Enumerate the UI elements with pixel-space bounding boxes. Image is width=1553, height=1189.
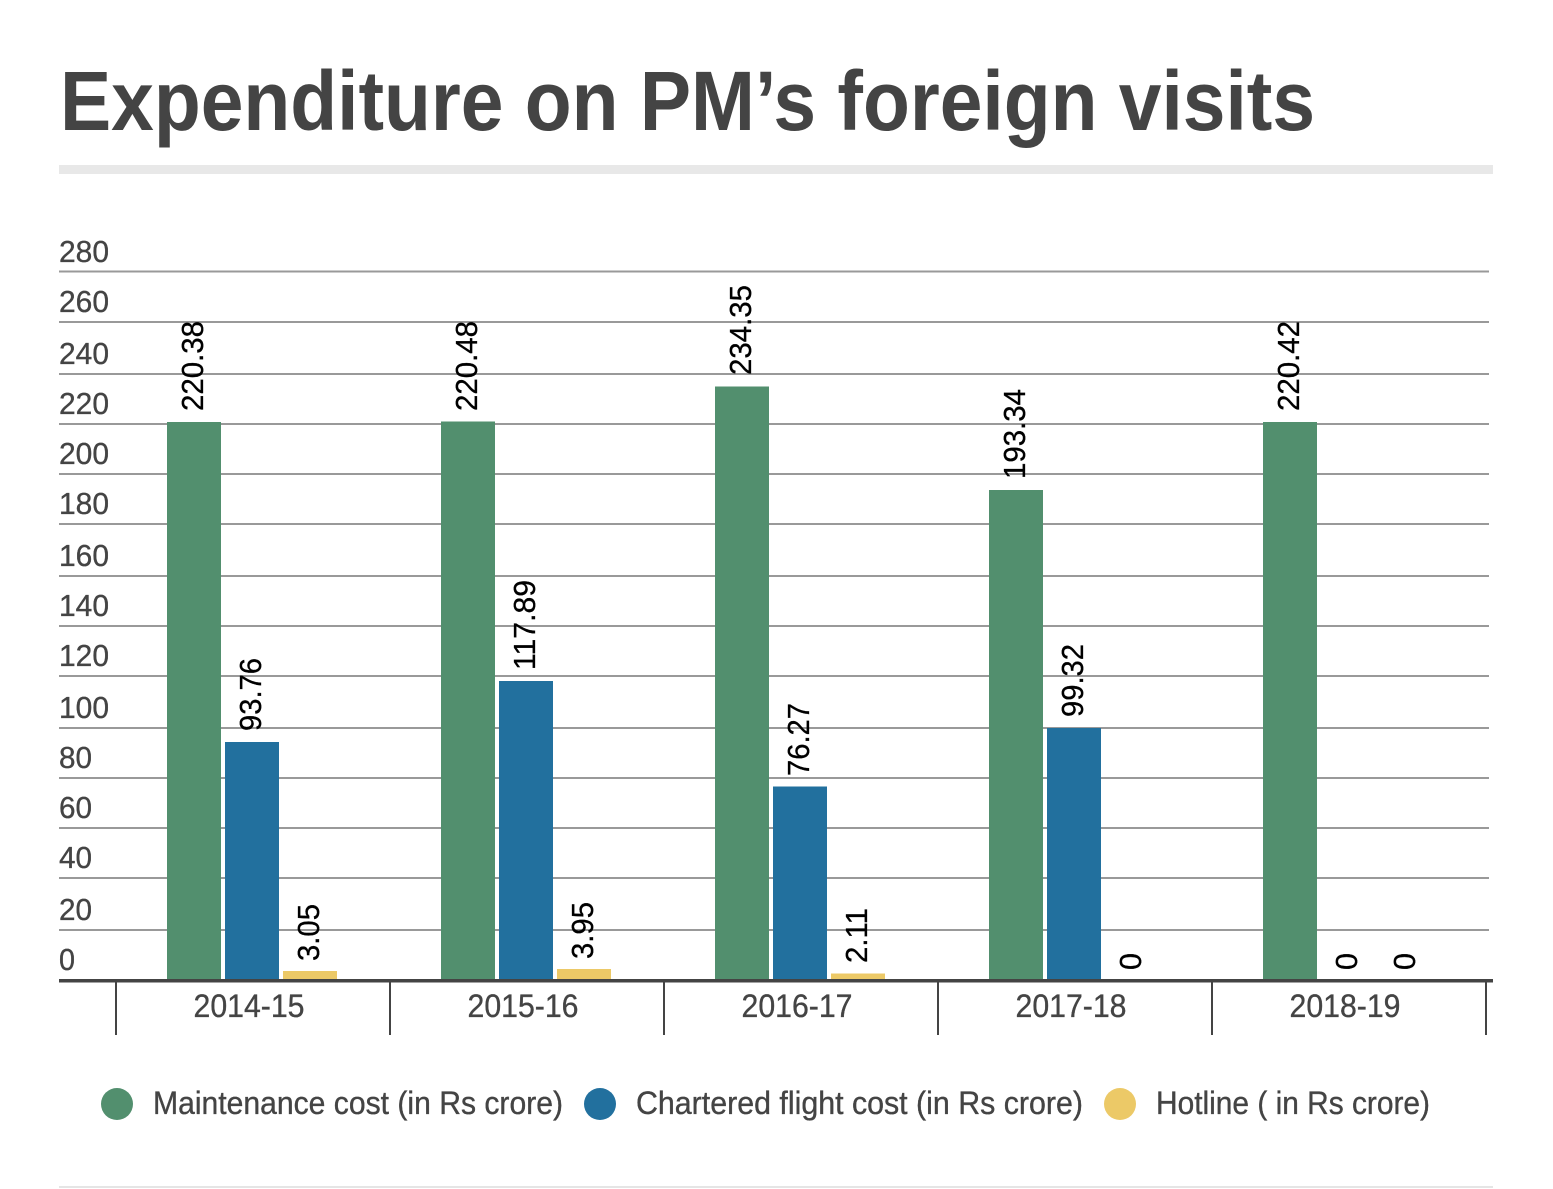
bars 2014-15: 93.76 xyxy=(233,658,268,731)
bars 2016-17: 76.27 xyxy=(781,703,816,776)
bars 2016-17: 234.35 xyxy=(723,285,758,375)
x axis: 2018-19 xyxy=(1290,988,1400,1024)
bars 2015-16: 3.95 xyxy=(565,902,600,959)
y axis labels: 20 xyxy=(59,892,92,927)
y axis labels: 40 xyxy=(59,840,92,875)
title: Expenditure on PM’s foreign visits xyxy=(60,54,1315,148)
bars 2015-16: 220.48 xyxy=(449,321,484,411)
y axis labels: 220 xyxy=(59,386,109,421)
y axis labels: 280 xyxy=(59,234,109,269)
y axis labels: 240 xyxy=(59,336,109,371)
y axis labels: 180 xyxy=(59,486,109,521)
y axis labels: 200 xyxy=(59,436,109,471)
y axis labels: 80 xyxy=(59,740,92,775)
bars 2018-19: 0 xyxy=(1387,953,1422,970)
bars 2015-16: 117.89 xyxy=(507,580,542,670)
legend xyxy=(101,1085,1430,1121)
bars 2018-19: 220.42 xyxy=(1271,321,1306,411)
y axis labels: 100 xyxy=(59,690,109,725)
bars 2017-18: 99.32 xyxy=(1055,644,1090,717)
y axis labels: 60 xyxy=(59,790,92,825)
y axis labels: 140 xyxy=(59,588,109,623)
x axis xyxy=(59,979,1493,1035)
x axis: 2016-17 xyxy=(742,988,852,1024)
bars 2016-17 xyxy=(715,285,885,980)
y axis labels: 260 xyxy=(59,284,109,319)
y axis labels: 0 xyxy=(59,942,75,977)
legend item: chartered flight cost: Chartered flight cost (in Rs crore) xyxy=(636,1085,1083,1121)
bars 2016-17: 2.11 xyxy=(839,908,874,963)
bars 2017-18: 0 xyxy=(1113,953,1148,970)
bars 2014-15 xyxy=(167,321,337,980)
x axis: 2014-15 xyxy=(194,988,304,1024)
bars 2018-19 xyxy=(1263,321,1422,980)
legend item: maintenance cost: Maintenance cost (in Rs crore) xyxy=(153,1085,563,1121)
bar chart xyxy=(59,234,1493,1035)
bars 2017-18 xyxy=(989,389,1148,980)
bars 2017-18: 193.34 xyxy=(997,389,1032,479)
x axis: 2015-16 xyxy=(468,988,578,1024)
bars 2015-16 xyxy=(441,321,611,980)
bars 2014-15: 220.38 xyxy=(175,321,210,411)
bars 2014-15: 3.05 xyxy=(291,904,326,961)
y axis labels: 160 xyxy=(59,538,109,573)
bars 2018-19: 0 xyxy=(1329,953,1364,970)
x axis: 2017-18 xyxy=(1016,988,1126,1024)
legend item: hotline: Hotline ( in Rs crore) xyxy=(1156,1085,1430,1121)
y axis labels xyxy=(59,234,109,977)
y axis labels: 120 xyxy=(59,638,109,673)
